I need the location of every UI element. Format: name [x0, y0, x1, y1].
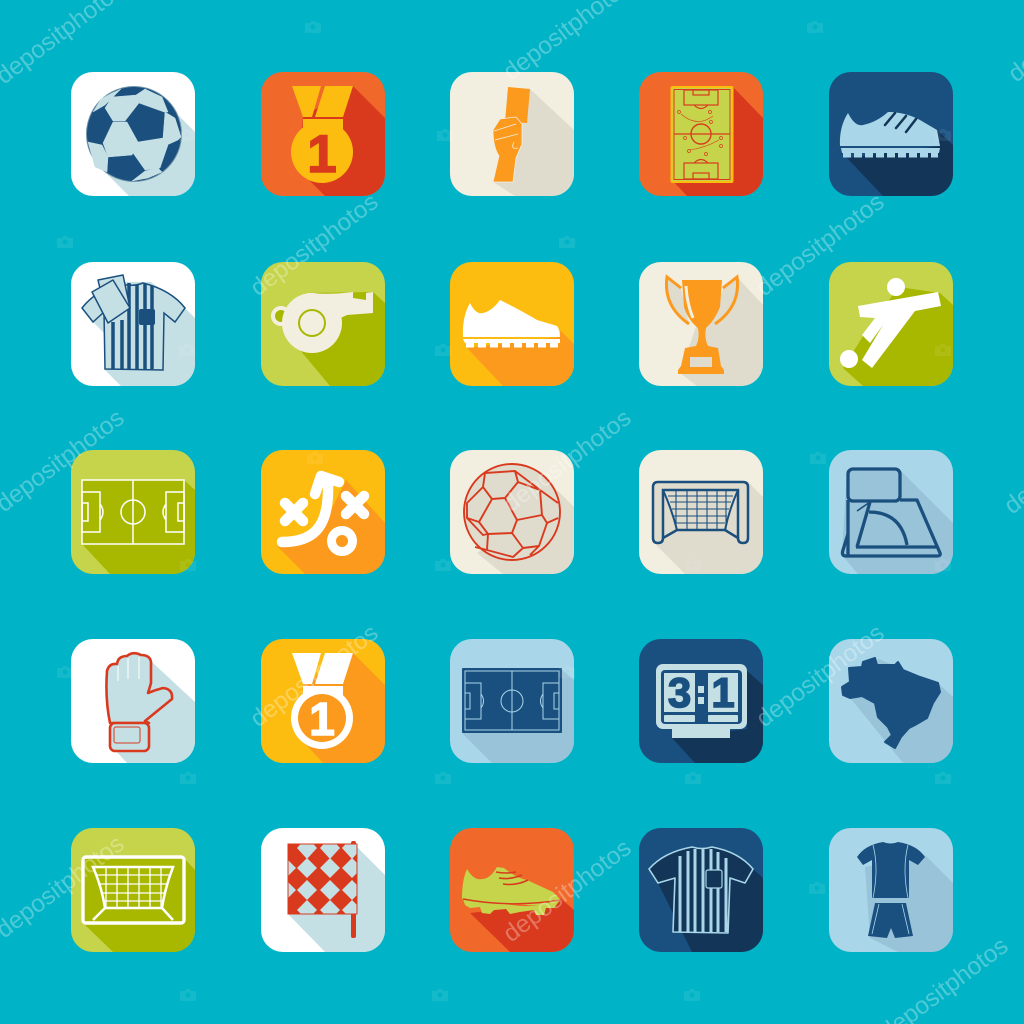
watermark text: depositphotos: [245, 619, 383, 733]
tile: green cleat: [450, 828, 574, 952]
tile: light blue boot on navy: [829, 72, 953, 196]
tile background and long shadow: [71, 450, 195, 574]
icon: linesman flag: [276, 837, 362, 938]
icon: scoreboard 3:1: 3: [668, 669, 691, 716]
watermark text: depositphotos: [498, 404, 636, 518]
tile background and long shadow: [450, 72, 574, 196]
icon: kicking player: [840, 278, 941, 368]
watermark text: depositphotos: [751, 619, 889, 733]
icon: goal: [83, 857, 184, 923]
icon: medal with number 1: 1: [307, 125, 337, 184]
tile: referee shirt with cards: [71, 262, 195, 386]
tile background and long shadow: [450, 639, 574, 763]
tile: scoreboard: [639, 639, 763, 763]
icon: trophy: [666, 277, 738, 374]
tile: red card in hand: [450, 72, 574, 196]
icon: soccer ball: [86, 86, 182, 182]
icon: cleat: [462, 867, 561, 915]
tile background and long shadow: [829, 639, 953, 763]
icon: outlined ball: [464, 464, 560, 560]
icon: vertical pitch with tactics: [672, 87, 732, 182]
tile background and long shadow: [261, 72, 385, 196]
icon: pitch lines: [82, 480, 184, 544]
icon: scoreboard 3:1: [656, 664, 747, 738]
icon: medal with number 1: 1: [309, 693, 335, 745]
tile background and long shadow: [261, 450, 385, 574]
tile: gold medal: [261, 72, 385, 196]
tile background and long shadow: [639, 262, 763, 386]
tile: white goal on green: [71, 828, 195, 952]
tile: referee shirt on navy: [639, 828, 763, 952]
icon: striped shirt: [649, 847, 753, 933]
tile: white boot on yellow: [450, 262, 574, 386]
tile: goalkeeper glove: [71, 639, 195, 763]
tile background and long shadow: [450, 262, 574, 386]
tile: goal in perspective: [829, 450, 953, 574]
icon: goal: [653, 482, 748, 543]
tile background and long shadow: [261, 828, 385, 952]
tile: white medal: [261, 639, 385, 763]
tile: checkered flag: [261, 828, 385, 952]
tile: soccer ball: [71, 72, 195, 196]
icon: tactics arrow and marks: [282, 476, 364, 552]
icon: shirt and shorts: [857, 842, 925, 938]
tile background and long shadow: [639, 72, 763, 196]
tile: trophy: [639, 262, 763, 386]
tile background and long shadow: [450, 828, 574, 952]
tile background and long shadow: [829, 72, 953, 196]
tile background and long shadow: [71, 262, 195, 386]
watermark text: depositphotos: [751, 188, 889, 302]
tile background and long shadow: [71, 639, 195, 763]
icon: pitch: [462, 668, 562, 733]
icon: boot: [840, 112, 940, 155]
tile background and long shadow: [261, 639, 385, 763]
icon: boot: [463, 300, 560, 345]
icon: hand holding card: [493, 87, 530, 182]
tile: football kit: [829, 828, 953, 952]
icon: whistle: [273, 292, 373, 353]
icon: scoreboard 3:1: 1: [711, 669, 735, 716]
tile: navy goal on cream: [639, 450, 763, 574]
tile background and long shadow: [639, 828, 763, 952]
tile: kicking player: [829, 262, 953, 386]
tile background and long shadow: [829, 450, 953, 574]
tile: whistle: [261, 262, 385, 386]
tile background and long shadow: [829, 262, 953, 386]
icon: perspective goal: [842, 469, 940, 556]
tile background and long shadow: [71, 72, 195, 196]
tile: tactics pitch: [639, 72, 763, 196]
watermark text: depositphotos: [245, 188, 383, 302]
watermark text: depositphotos: [498, 834, 636, 948]
tile background and long shadow: [71, 828, 195, 952]
tile background and long shadow: [450, 450, 574, 574]
tile: green horizontal pitch: [71, 450, 195, 574]
tile background and long shadow: [639, 450, 763, 574]
tile: red outline ball: [450, 450, 574, 574]
tile: map of Brazil: [829, 639, 953, 763]
icon: referee shirt: [82, 275, 185, 370]
tile: navy pitch: [450, 639, 574, 763]
icon: Brazil map: [842, 658, 940, 748]
tile: tactics arrow: [261, 450, 385, 574]
tile background and long shadow: [639, 639, 763, 763]
tile background and long shadow: [261, 262, 385, 386]
icon: glove: [106, 653, 172, 751]
tile background and long shadow: [829, 828, 953, 952]
